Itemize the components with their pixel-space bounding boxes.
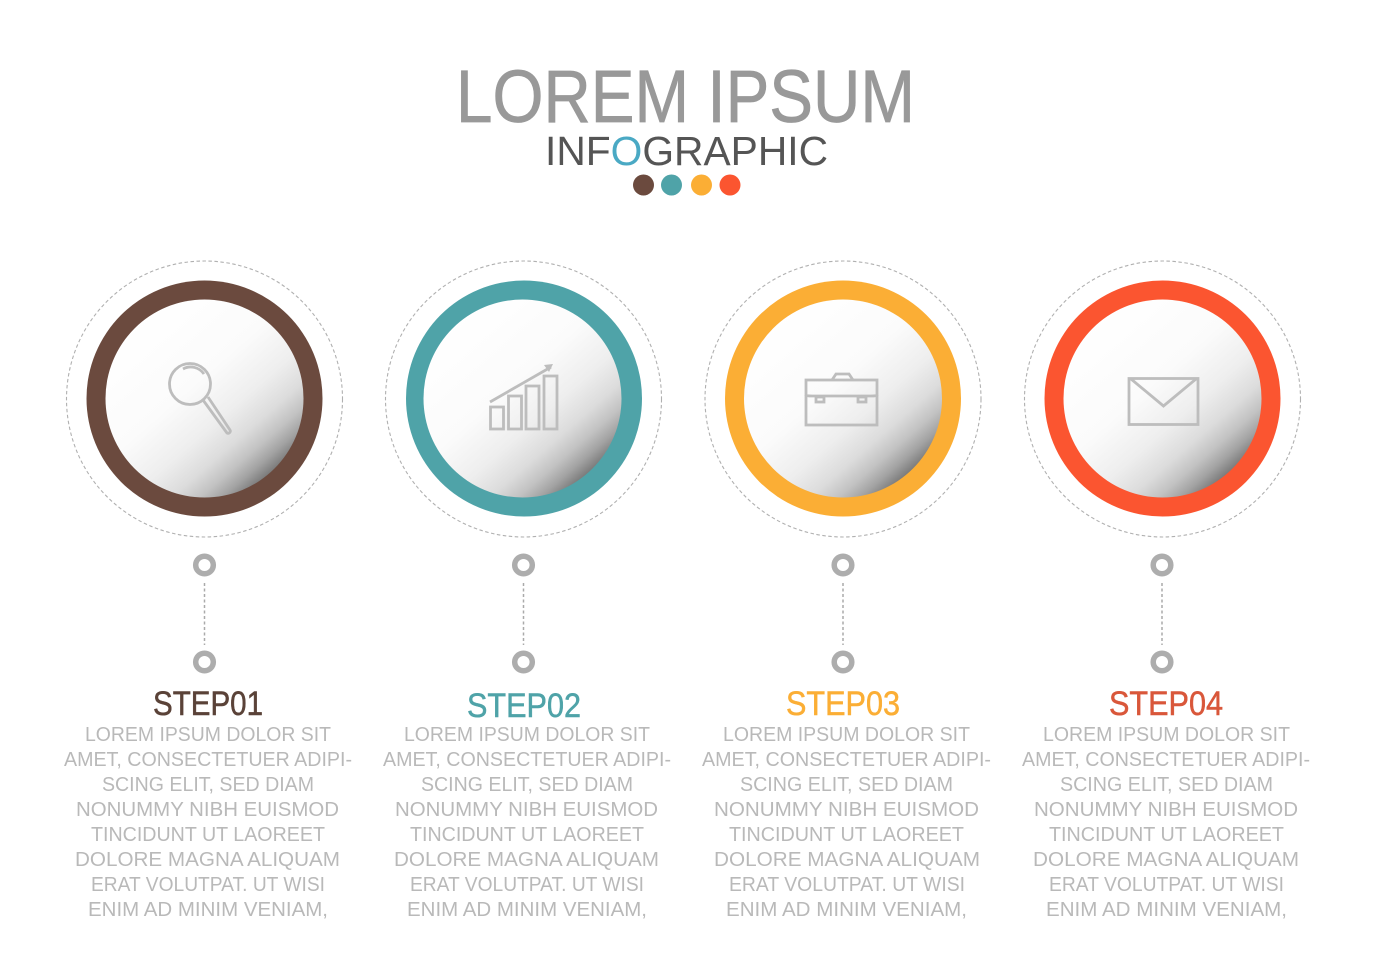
panel: step 04 [1022, 261, 1310, 921]
body text: step 01: AMET, CONSECTETUER ADIPI- [64, 749, 352, 771]
connector bottom node [196, 653, 213, 671]
body text: step 03: NONUMMY NIBH EUISMOD [714, 799, 979, 821]
dashed outer circle [386, 261, 662, 537]
body text: step 04 [1022, 724, 1310, 921]
body text: step 03 [702, 724, 991, 921]
body text: step 01: ERAT VOLUTPAT. UT WISI [91, 874, 325, 896]
icon: envelope [1129, 378, 1198, 424]
body text: step 01: DOLORE MAGNA ALIQUAM [75, 849, 340, 871]
body text: step 02: ERAT VOLUTPAT. UT WISI [410, 874, 644, 896]
body text: step 01: NONUMMY NIBH EUISMOD [76, 799, 339, 821]
body text: step 04: NONUMMY NIBH EUISMOD [1034, 799, 1298, 821]
body text: step 04: ERAT VOLUTPAT. UT WISI [1049, 874, 1284, 896]
connector dashed line [1161, 583, 1163, 645]
body text: step 01: ENIM AD MINIM VENIAM, [88, 899, 328, 921]
heading: step 04: STEP04 [1109, 685, 1223, 723]
body text: step 03: ENIM AD MINIM VENIAM, [726, 899, 967, 921]
panel: step 01 [64, 261, 352, 921]
brown ring [86, 280, 322, 516]
body text: step 03: SCING ELIT, SED DIAM [740, 774, 953, 796]
connector top node [515, 556, 532, 574]
panel: step 03 [702, 261, 991, 921]
inner shaded disc [106, 300, 304, 498]
connector bottom node [1153, 653, 1171, 671]
amber ring [725, 280, 961, 516]
dashed outer circle [66, 261, 342, 537]
body text: step 01 [64, 724, 352, 921]
connector dashed line [204, 583, 206, 645]
body text: step 02: LOREM IPSUM DOLOR SIT [404, 724, 650, 746]
title: LOREM IPSUM [456, 55, 915, 138]
icon: briefcase [806, 374, 877, 425]
icon: rising bar chart [490, 364, 557, 429]
body text: step 02: ENIM AD MINIM VENIAM, [407, 899, 647, 921]
body text: step 02: SCING ELIT, SED DIAM [421, 774, 633, 796]
subtitle: INFOGRAPHIC [545, 128, 828, 174]
body text: step 01: TINCIDUNT UT LAOREET [91, 824, 325, 846]
connector bottom node [515, 653, 532, 671]
body text: step 03: TINCIDUNT UT LAOREET [729, 824, 964, 846]
body text: step 04: DOLORE MAGNA ALIQUAM [1033, 849, 1299, 871]
heading: step 03: STEP03 [786, 685, 900, 723]
body text: step 04: ENIM AD MINIM VENIAM, [1046, 899, 1287, 921]
inner shaded disc [424, 300, 622, 498]
body text: step 04: LOREM IPSUM DOLOR SIT [1043, 724, 1290, 746]
dashed outer circle [705, 261, 981, 537]
legend dots [633, 174, 740, 196]
body text: step 03: ERAT VOLUTPAT. UT WISI [729, 874, 965, 896]
connector top node [1153, 556, 1171, 574]
heading: step 01: STEP01 [153, 685, 263, 723]
dashed outer circle [1024, 261, 1300, 537]
heading: step 02: STEP02 [467, 687, 581, 725]
teal ring [406, 280, 642, 516]
body text: step 04: SCING ELIT, SED DIAM [1060, 774, 1273, 796]
body text: step 03: DOLORE MAGNA ALIQUAM [714, 849, 980, 871]
inner shaded disc [744, 300, 942, 498]
body text: step 04: AMET, CONSECTETUER ADIPI- [1022, 749, 1310, 771]
connector top node [196, 556, 213, 574]
inner shaded disc [1064, 300, 1262, 498]
body text: step 02: AMET, CONSECTETUER ADIPI- [383, 749, 671, 771]
connector top node [834, 556, 852, 574]
connector dashed line [522, 583, 524, 645]
connector bottom node [834, 653, 852, 671]
panel: step 02 [383, 261, 671, 921]
icon: magnifying glass [170, 364, 230, 433]
body text: step 01: LOREM IPSUM DOLOR SIT [85, 724, 331, 746]
body text: step 02 [383, 724, 671, 921]
body text: step 03: AMET, CONSECTETUER ADIPI- [702, 749, 991, 771]
body text: step 03: LOREM IPSUM DOLOR SIT [723, 724, 970, 746]
body text: step 01: SCING ELIT, SED DIAM [102, 774, 314, 796]
body text: step 02: TINCIDUNT UT LAOREET [410, 824, 644, 846]
body text: step 04: TINCIDUNT UT LAOREET [1049, 824, 1284, 846]
body text: step 02: DOLORE MAGNA ALIQUAM [394, 849, 659, 871]
orange ring [1044, 280, 1280, 516]
body text: step 02: NONUMMY NIBH EUISMOD [395, 799, 658, 821]
connector dashed line [842, 583, 844, 645]
